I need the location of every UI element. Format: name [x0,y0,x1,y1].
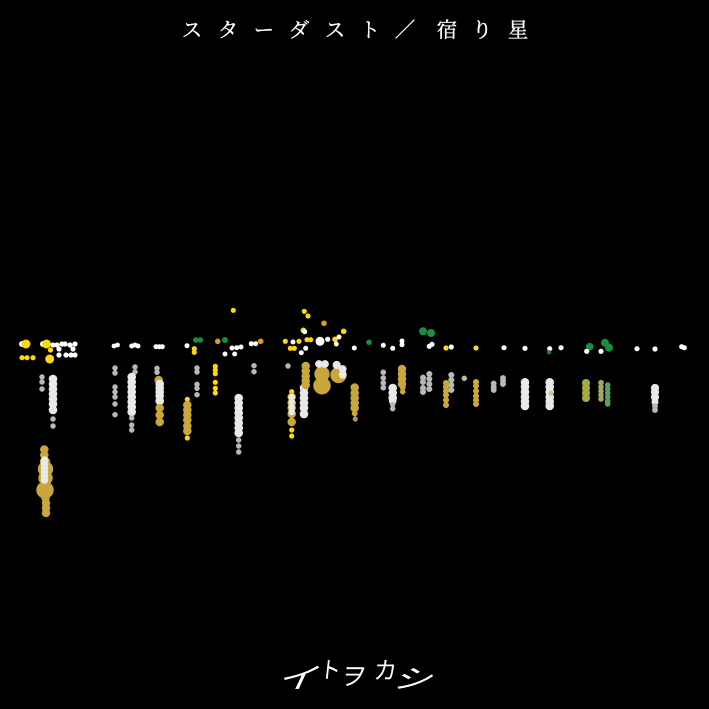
central lower columns [285,362,310,439]
title: スターダスト／宿り星 [182,18,528,42]
logo: artist name: カ [372,659,398,685]
track 15 dots [419,327,435,395]
track 7 dots [213,338,220,396]
track 22 dots [634,344,687,413]
track 5 dots [183,343,191,441]
upper dots: track group 1 [19,340,78,364]
track 18 dots [491,345,507,393]
gold column: long bright cluster [36,446,54,517]
track 16 dots [443,344,467,408]
track 13 dots [389,346,397,411]
track 20 dots [546,345,564,410]
central upper cluster [283,309,357,355]
logo: artist name: イ [273,662,327,694]
track 4 dots [154,344,165,426]
track 17 dots [473,345,479,407]
lower column: track 1 [39,374,57,429]
logo: artist name: ト [318,657,342,683]
track 14 dots [398,338,406,394]
track 12 dots [366,340,386,390]
track 19 dots [521,346,529,410]
track 8 dots [222,308,244,455]
track 6 dots [192,337,203,397]
logo: artist name [273,657,442,694]
track 21 dots: green and olive [582,339,613,407]
logo: artist name: シ [388,665,442,694]
track 3 dots [128,342,140,433]
track 2 dots [112,343,120,417]
logo: artist name: ヲ [338,663,369,691]
large gold bubbles [314,360,346,394]
gold column right of center [351,384,359,422]
track 9 dots [249,338,264,374]
dot chart: star constellation of notes [19,308,687,517]
